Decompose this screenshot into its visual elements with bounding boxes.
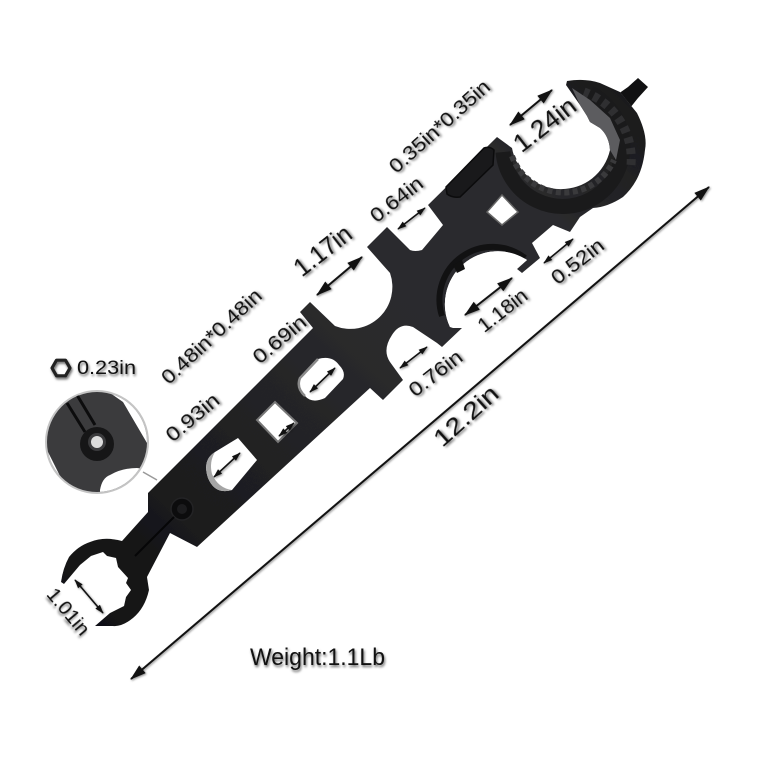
inner arc tab <box>453 260 465 273</box>
oval hole upper shading <box>299 359 318 396</box>
inset magnifier <box>45 390 158 494</box>
lens content <box>47 392 147 492</box>
arrow: 1.18in <box>465 278 512 315</box>
raised block <box>446 147 494 197</box>
infographic: wrench dimensions <box>44 78 712 682</box>
arrow: square hole <box>279 423 294 436</box>
hex size icon <box>52 360 70 376</box>
arrow: 1.24in <box>510 90 552 125</box>
arrow: 1.01in <box>75 580 103 613</box>
lens rim <box>45 390 149 494</box>
ring inner face <box>572 88 620 160</box>
arrow: 0.76in <box>400 347 427 368</box>
label: 0.48in*0.48in: 0.48in*0.48in <box>157 285 267 389</box>
arrow: 1.17in <box>317 257 362 295</box>
label: 0.23in: 0.23in <box>77 358 136 379</box>
label: 1.24in: 1.24in <box>508 92 582 158</box>
ring serrations lower <box>512 156 614 193</box>
label: weight: Weight:1.1Lb <box>250 644 385 671</box>
ring serrations upper <box>584 92 631 165</box>
square hole upper <box>487 195 518 225</box>
label: 0.52in: 0.52in <box>547 235 609 289</box>
arrow: 0.93in hole <box>214 453 240 477</box>
oval hole upper <box>299 358 344 401</box>
label: 0.64in: 0.64in <box>366 173 428 227</box>
label: 0.69in: 0.69in <box>249 311 311 369</box>
label: 1.17in: 1.17in <box>288 220 358 282</box>
square hole lower <box>257 402 297 442</box>
inner arc cutout <box>445 251 527 327</box>
label: 0.35in*0.35in: 0.35in*0.35in <box>385 76 495 178</box>
arrow: 0.52in <box>544 239 573 263</box>
wrench tool <box>61 78 648 626</box>
ring dark band <box>503 93 623 206</box>
tang on ring end <box>618 78 648 108</box>
groove <box>135 517 174 556</box>
label: 0.93in: 0.93in <box>162 389 224 447</box>
oval hole lower shading <box>206 452 232 491</box>
label: 0.76in: 0.76in <box>405 346 467 402</box>
wrench body <box>61 80 646 626</box>
label: 12.2in: 12.2in <box>428 380 504 453</box>
label: 1.01in: 1.01in <box>42 585 93 640</box>
arrow: overall length <box>131 187 709 679</box>
inner arc lip <box>439 247 525 316</box>
bolt <box>171 498 193 520</box>
arrow: 0.69in hole <box>310 368 335 392</box>
arrow: 0.64in <box>398 208 425 229</box>
label: 1.18in: 1.18in <box>474 285 532 337</box>
oval hole lower <box>206 438 257 491</box>
leader line <box>143 472 157 480</box>
